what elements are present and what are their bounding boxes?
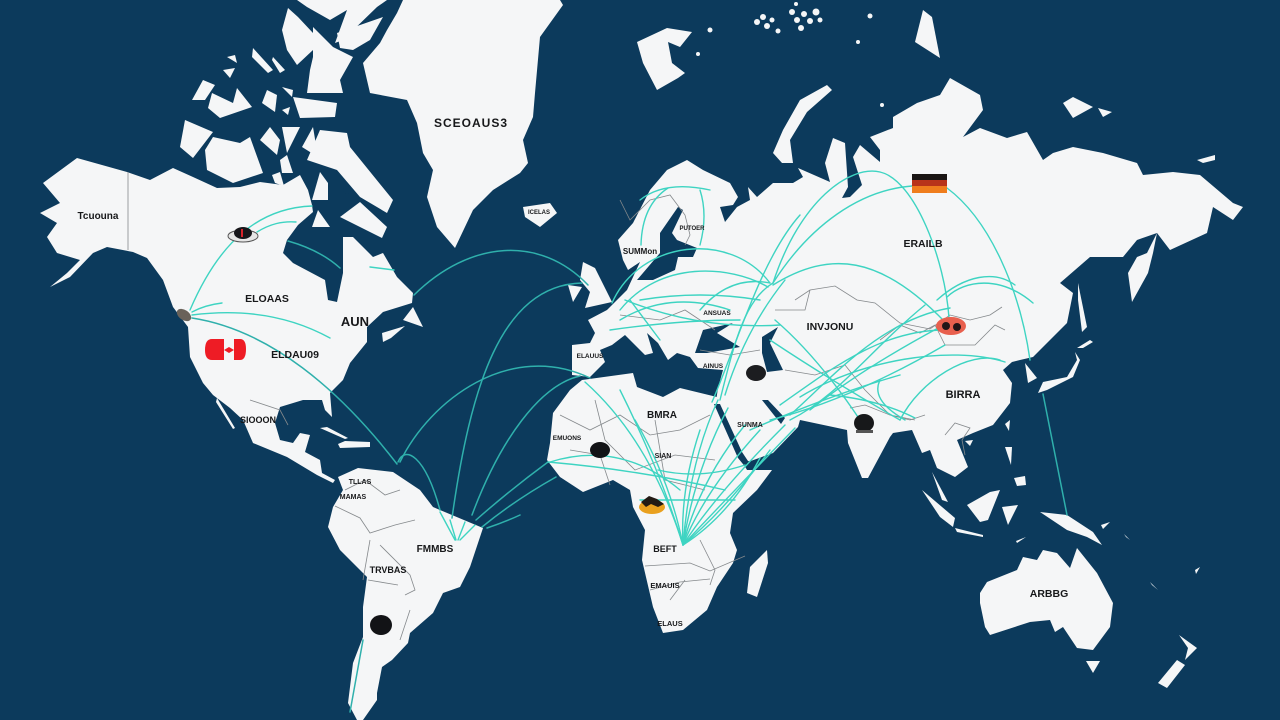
landmass: New Zealand bbox=[1158, 635, 1197, 688]
label: Colombia: TLLAS bbox=[349, 479, 372, 486]
label: Kazakhstan: INVJONU bbox=[807, 321, 853, 333]
connection arcs: Europe and Russia bbox=[610, 171, 1030, 402]
label: Spain: ELAUUS bbox=[577, 353, 604, 360]
label: Congo: BEFT bbox=[653, 544, 677, 554]
landmass: North America bbox=[40, 158, 423, 483]
label: Libya: BMRA bbox=[647, 410, 677, 421]
landmass: Madagascar bbox=[747, 550, 768, 597]
country borders bbox=[128, 172, 1005, 640]
flag: Germany bbox=[912, 174, 947, 193]
label: South Africa: ELAUS bbox=[657, 619, 683, 628]
label: United States: ELDAU09 bbox=[271, 349, 319, 361]
sea: Baltic bbox=[637, 207, 697, 280]
icon: marker in South America bbox=[370, 615, 392, 635]
label: Bolivia: TRVBAS bbox=[370, 565, 406, 575]
landmass: Greenland bbox=[363, 0, 563, 248]
icon: marker in Iran bbox=[746, 365, 766, 381]
label: China: BIRRA bbox=[946, 389, 980, 401]
label: Russia: ERAILB bbox=[903, 238, 943, 250]
label: Mauritania: EMUONS bbox=[553, 435, 582, 442]
landmass: South America bbox=[328, 468, 483, 720]
landmass: Africa bbox=[547, 373, 772, 633]
sea: Caspian bbox=[762, 327, 783, 372]
connection arcs: Central and East Asia bbox=[750, 283, 1067, 515]
landmass: Svalbard and northern islands bbox=[637, 2, 1215, 163]
label: Arabia: SUNMA bbox=[737, 422, 763, 429]
label: Iceland: ICELAS bbox=[528, 210, 550, 216]
landmass: British Isles bbox=[568, 262, 612, 308]
label: Sweden: PUTOER bbox=[680, 226, 705, 232]
label: Norway: SUMMon bbox=[623, 247, 657, 256]
label: Brazil: FMMBS bbox=[417, 544, 454, 555]
label: Chad: SIAN bbox=[655, 453, 671, 460]
landmass: Australia bbox=[980, 548, 1113, 650]
label: Quebec: AUN bbox=[341, 314, 369, 329]
label: Australia: ARBBG bbox=[1030, 588, 1068, 600]
landmass: Asia-Pacific islands bbox=[922, 340, 1200, 590]
flag: Canada bbox=[205, 339, 246, 360]
icon: marker in Canada bbox=[228, 227, 258, 242]
label: Angola: EMAUIS bbox=[650, 581, 680, 590]
icon: marker in Central Africa bbox=[639, 496, 665, 514]
sea: Red Sea and Gulf of Aden bbox=[714, 404, 773, 470]
icon: marker on west coast bbox=[175, 306, 193, 324]
connection arcs: North America bbox=[190, 206, 397, 464]
sea: Persian Gulf bbox=[762, 400, 785, 424]
label: Venezuela: MAMAS bbox=[340, 494, 367, 501]
icon: marker in West Africa bbox=[590, 442, 610, 458]
label: Canada: ELOAAS bbox=[245, 293, 289, 305]
icon: marker in Central Asia bbox=[936, 317, 966, 335]
landmass: Kamchatka and Sakhalin bbox=[1078, 233, 1157, 332]
landmass: Iceland bbox=[523, 203, 557, 227]
landmass: Tasmania bbox=[1086, 661, 1100, 673]
label: Ukraine: ANSUAS bbox=[703, 310, 731, 317]
icon: marker in India bbox=[854, 414, 874, 433]
connection arcs: Atlantic crossings bbox=[350, 250, 590, 712]
label: Alaska: Tcuouna bbox=[78, 211, 119, 222]
landmass: Eurasia bbox=[572, 78, 1243, 478]
connection arcs: Africa fan bbox=[548, 382, 795, 545]
sea: Black Sea bbox=[695, 323, 740, 353]
label: Turkey: AINUS bbox=[703, 363, 724, 370]
label: Greenland: SCEOAUS3 bbox=[434, 116, 508, 130]
landmass: Arctic islands bbox=[180, 0, 393, 238]
label: Mexico: SIOOON bbox=[240, 415, 276, 425]
